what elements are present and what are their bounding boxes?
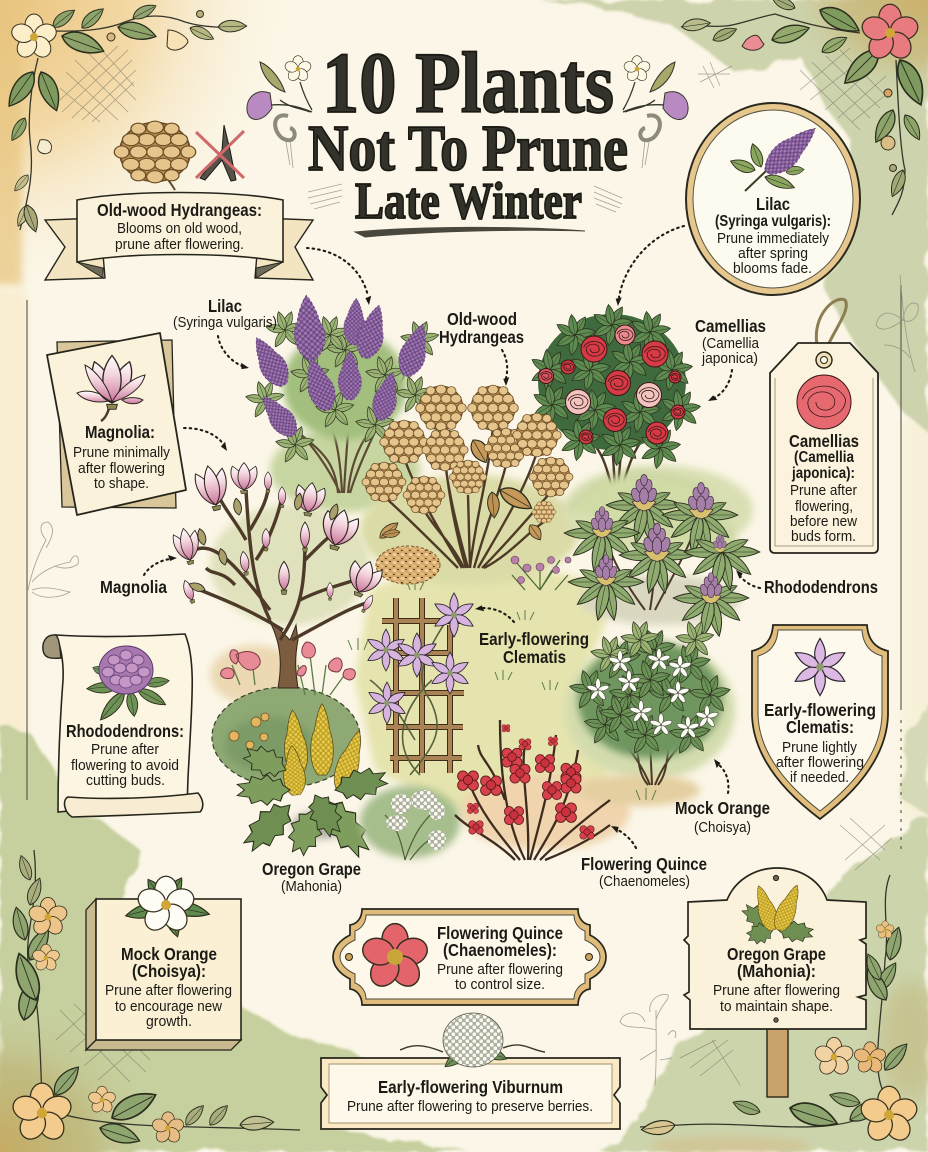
- title ornament: left: [247, 56, 312, 168]
- arrow: old-wood label: [502, 350, 509, 386]
- banner text: [97, 200, 262, 253]
- rhododendron text: Rhododendrons:: [66, 721, 184, 741]
- panel: rhododendrons scroll: [43, 634, 203, 817]
- rhododendron text: cutting buds.: [86, 773, 165, 789]
- label: mock orange: (Choisya): [694, 820, 751, 836]
- panel: old-wood hydrangeas banner: [45, 121, 313, 280]
- quince text: Flowering Quince: [437, 923, 563, 943]
- plant: old-wood hydrangea: [362, 385, 573, 584]
- label: mock orange: Mock Orange: [675, 798, 770, 818]
- viburnum text: Early-flowering Viburnum: [378, 1077, 563, 1097]
- grass tufts: [348, 580, 656, 800]
- clematis text: if needed.: [790, 770, 849, 786]
- corner vine: bottom right: [640, 875, 920, 1145]
- panel: magnolia card: [47, 333, 186, 515]
- mock orange text: (Choisya):: [132, 961, 206, 981]
- plant: rhododendron: [564, 473, 760, 637]
- magnolia text: Magnolia:: [85, 422, 155, 442]
- label: camellias: Camellias: [695, 316, 766, 336]
- lilac text: blooms fade.: [733, 261, 812, 277]
- icon: quince flower: [359, 924, 431, 992]
- panel: oregon grape sign: [684, 868, 866, 1097]
- rhododendron text: Prune after: [91, 742, 159, 758]
- arrow: hydrangea banner to plant: [307, 248, 372, 305]
- camellia text: Camellias: [789, 431, 859, 451]
- label: oregon grape: [262, 859, 361, 895]
- camellia text: [789, 431, 859, 545]
- label: clematis: [479, 629, 589, 667]
- label: old-wood hydrangeas: [439, 309, 524, 347]
- arrow: rhododendrons label: [734, 568, 760, 588]
- camellia text: Prune after: [790, 483, 857, 499]
- label: clematis: Early-flowering: [479, 629, 589, 649]
- arrow: camellia label: [707, 370, 732, 404]
- camellia text: (Camellia: [794, 449, 854, 466]
- banner tails: [45, 218, 313, 280]
- icon: oregon grape: [738, 882, 814, 947]
- plant: lilac: [245, 294, 440, 493]
- plant: flowering quince: [455, 720, 610, 860]
- magnolia text: after flowering: [78, 461, 165, 477]
- plant: trellis clematis: [366, 593, 475, 775]
- arrow: magnolia label: [144, 555, 177, 575]
- sketch flower: bottom: [620, 994, 676, 1085]
- plant: camellia: [530, 304, 701, 488]
- garden illustration: [171, 294, 760, 863]
- camellia text: buds form.: [791, 529, 856, 545]
- lilac text: Prune immediately: [717, 231, 830, 247]
- arrow: lilac label: [218, 336, 250, 371]
- label: flowering quince: Flowering Quince: [581, 854, 707, 874]
- quince text: Prune after flowering: [437, 962, 563, 978]
- arrow: quince label: [610, 823, 636, 848]
- rhododendron text: [66, 721, 184, 789]
- sketch flower: right margin: [876, 275, 918, 372]
- magnolia text: Prune minimally: [73, 445, 171, 461]
- title ornament: right: [623, 56, 688, 168]
- panel: early-flowering viburnum: [321, 1013, 620, 1129]
- panel: flowering quince plaque: [333, 909, 606, 1005]
- oregon grape text: Oregon Grape: [727, 944, 826, 964]
- corner vine: bottom left: [9, 850, 300, 1148]
- plaque: [321, 1058, 620, 1129]
- plant: oregon grape mound: [212, 687, 360, 787]
- title: Not To Prune: [308, 112, 628, 185]
- clematis text: Early-flowering: [764, 700, 876, 720]
- panel: clematis shield: [752, 625, 888, 819]
- icon: crossed-out secateurs: [196, 125, 244, 181]
- lilac text: [715, 194, 831, 277]
- camellia text: flowering,: [795, 499, 853, 515]
- plant: pink tulips: [221, 642, 355, 695]
- plant labels: [100, 296, 878, 895]
- label: rhododendrons: Rhododendrons: [764, 577, 878, 597]
- clematis text: Clematis:: [786, 717, 854, 737]
- label: lilac: [173, 296, 277, 331]
- panel: lilac circle: [686, 103, 860, 295]
- icon: viburnum cluster: [400, 1013, 545, 1071]
- label: old-wood hydrangeas: Hydrangeas: [439, 327, 524, 347]
- icon: magnolia: [77, 356, 145, 421]
- clematis text: Prune lightly: [782, 740, 858, 756]
- label: camellias: (Camellia: [702, 336, 760, 352]
- icon: rhododendron: [86, 646, 170, 724]
- camellia text: before new: [790, 514, 857, 530]
- tag loop: [816, 299, 846, 355]
- plant: mock orange: [569, 620, 731, 785]
- garden washes: [210, 428, 753, 850]
- mock orange text: Mock Orange: [121, 944, 217, 964]
- label: old-wood hydrangeas: Old-wood: [447, 309, 517, 329]
- icon: mock orange flower: [124, 875, 211, 939]
- title: Late Winter: [355, 173, 582, 230]
- lilac text: Lilac: [756, 194, 790, 214]
- icon: camellia: [797, 375, 851, 429]
- label: clematis: Clematis: [503, 647, 566, 667]
- oregon grape text: Prune after flowering: [713, 983, 840, 999]
- title flourish: [308, 184, 622, 237]
- banner text: prune after flowering.: [115, 237, 244, 253]
- arrow: mock orange label: [712, 757, 728, 793]
- border lines: [27, 285, 901, 850]
- label: oregon grape: (Mahonia): [281, 879, 342, 895]
- banner text: Blooms on old wood,: [117, 221, 242, 237]
- label: mock orange: [675, 798, 770, 836]
- mock orange text: [105, 944, 232, 1030]
- title text: 10 Plants: [322, 34, 614, 131]
- banner text: Old-wood Hydrangeas:: [97, 200, 262, 220]
- oregon grape text: [713, 944, 840, 1015]
- corner vine: top left: [3, 1, 247, 234]
- corner vine: top right: [681, 0, 928, 215]
- label: magnolia: Magnolia: [100, 577, 167, 597]
- rhododendron text: flowering to avoid: [71, 758, 179, 774]
- magnolia text: to shape.: [94, 476, 149, 492]
- arrow: clematis label: [475, 605, 514, 622]
- mock orange text: Prune after flowering: [105, 983, 232, 999]
- lilac text: (Syringa vulgaris):: [715, 213, 831, 230]
- clematis text: after flowering: [776, 755, 864, 771]
- viburnum text: [347, 1077, 593, 1115]
- label: flowering quince: (Chaenomeles): [599, 874, 690, 890]
- label: camellias: japonica): [701, 351, 758, 367]
- label: lilac: Lilac: [208, 296, 242, 316]
- oregon grape text: to maintain shape.: [720, 999, 833, 1015]
- mock orange text: to encourage new: [115, 999, 222, 1015]
- lilac text: after spring: [738, 246, 808, 262]
- plant: small purple alliums: [511, 556, 571, 590]
- banner body: [77, 192, 283, 262]
- oregon grape text: (Mahonia):: [737, 961, 816, 981]
- sign board: [684, 868, 866, 1029]
- panel: camellias tag: [770, 299, 878, 553]
- mock orange text: growth.: [146, 1014, 192, 1030]
- panel: mock orange block: [86, 875, 241, 1050]
- label: lilac: (Syringa vulgaris): [173, 315, 277, 331]
- plant: early-flowering viburnum: [360, 786, 460, 860]
- plant: magnolia: [171, 463, 385, 688]
- label: camellias: [695, 316, 766, 367]
- sketch flower: left margin: [28, 522, 78, 597]
- sign post: [767, 1029, 788, 1097]
- clematis text: [764, 700, 876, 786]
- quince text: [437, 923, 563, 993]
- label: oregon grape: Oregon Grape: [262, 859, 361, 879]
- tag body: [770, 343, 878, 553]
- plant: oregon grape: [229, 704, 390, 863]
- quince text: (Chaenomeles):: [443, 940, 557, 960]
- arrow: lilac circle to plant: [615, 226, 684, 306]
- icon: lilac sprig: [729, 119, 824, 192]
- label: flowering quince: [581, 854, 707, 890]
- icon: hydrangea: [114, 121, 196, 190]
- magnolia text: [73, 422, 171, 492]
- viburnum text: Prune after flowering to preserve berries.: [347, 1099, 593, 1115]
- arrow: magnolia card: [184, 428, 230, 452]
- icon: clematis: [793, 638, 847, 696]
- quince text: to control size.: [455, 977, 545, 993]
- callout arrows: [144, 226, 760, 848]
- title: [247, 34, 688, 237]
- camellia text: japonica):: [791, 465, 855, 482]
